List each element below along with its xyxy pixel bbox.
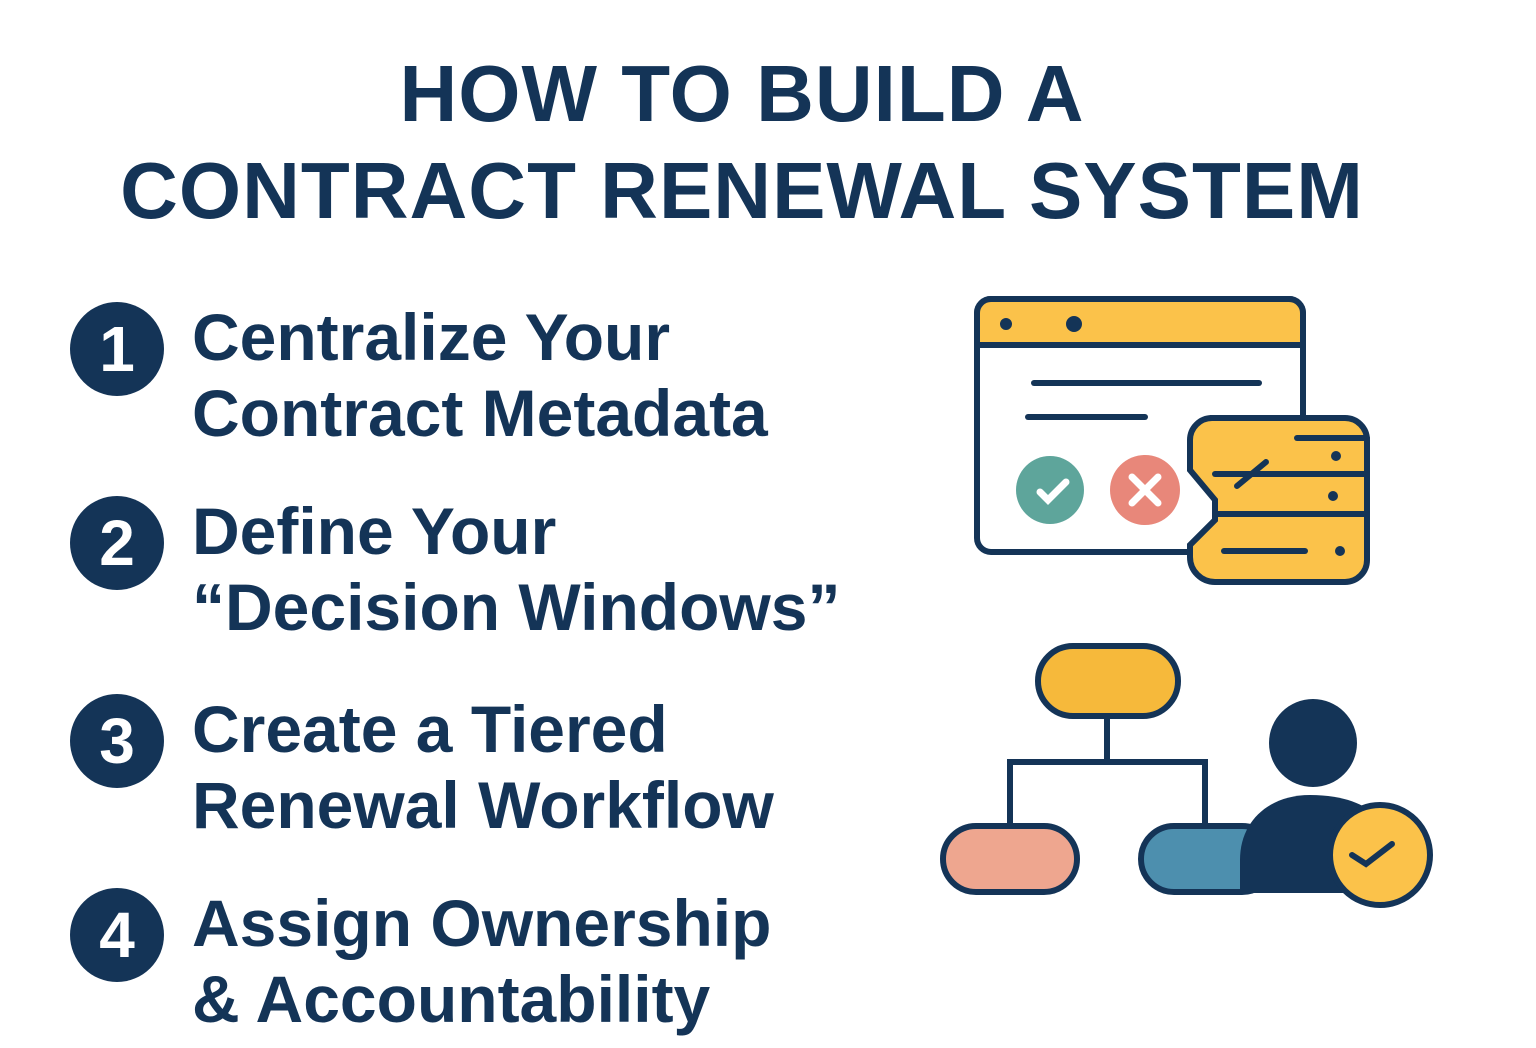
title [120, 49, 1364, 235]
step 4: & Accountability [192, 962, 710, 1036]
step 1: Centralize Your [192, 300, 670, 374]
title: HOW TO BUILD A [399, 49, 1085, 138]
step 3 [70, 692, 774, 842]
step 3: Renewal Workflow [192, 768, 774, 842]
step 3: Create a Tiered [192, 692, 668, 766]
step 1: Contract Metadata [192, 376, 768, 450]
step 1 [70, 300, 768, 450]
step 3: 3 [99, 705, 135, 777]
step 2: 2 [99, 507, 135, 579]
step 1: 1 [99, 313, 135, 385]
step 2: Define Your [192, 494, 556, 568]
step 4 [70, 886, 771, 1036]
step 2 [70, 494, 840, 644]
title: CONTRACT RENEWAL SYSTEM [120, 146, 1364, 235]
step 4: Assign Ownership [192, 886, 771, 960]
step 4: 4 [99, 899, 135, 971]
step 2: “Decision Windows” [192, 570, 840, 644]
